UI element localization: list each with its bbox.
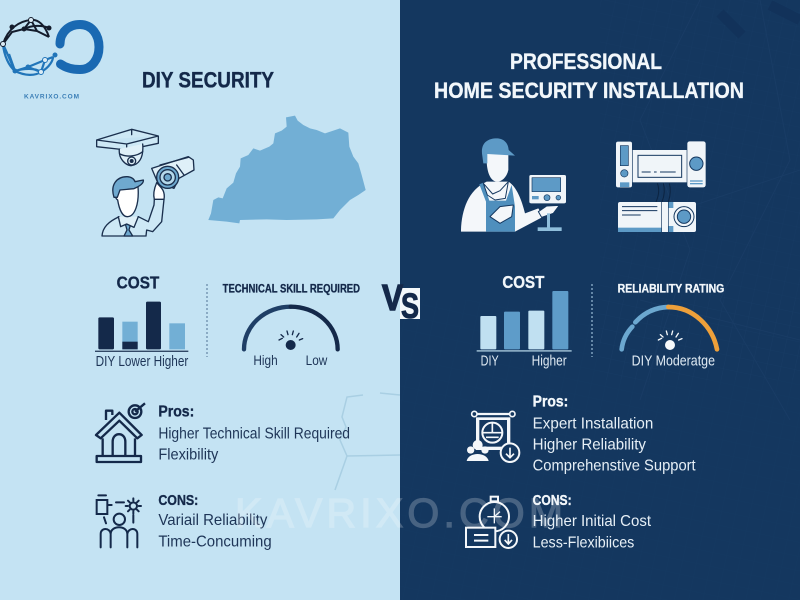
icon: installer with cameras <box>97 129 194 236</box>
chart: DIY cost: DIY Lower Higher <box>96 353 188 370</box>
chart: professional cost <box>477 272 572 370</box>
cons: professional: Less-Flexibiices <box>533 535 634 552</box>
gauge: technical skill <box>223 282 360 368</box>
chart: DIY cost: COST <box>117 273 160 293</box>
chart: professional cost: COST <box>502 272 545 292</box>
chart: DIY cost <box>95 273 188 370</box>
gauge: technical skill: Low <box>306 352 328 368</box>
gauge: reliability rating: DIY Moderatge <box>632 354 715 370</box>
title: DIY security: DIY SECURITY <box>142 68 274 92</box>
panel: DIY security <box>0 0 400 600</box>
chart: professional cost: Higher <box>532 354 567 370</box>
gauge: reliability rating <box>618 282 724 370</box>
pros: DIY: Flexibility <box>158 446 218 463</box>
icon: security equipment <box>616 141 706 232</box>
pros: professional: Pros: <box>533 394 568 411</box>
panel: professional installation <box>400 0 800 600</box>
badge: VS: S <box>401 287 419 326</box>
badge: VS: V <box>382 277 403 318</box>
icon: house with target <box>96 403 145 462</box>
cons: professional: CONS: <box>533 493 572 509</box>
pros: DIY <box>96 403 350 463</box>
icon: people with sun and device <box>97 495 141 547</box>
cons: DIY: Variail Reliability <box>158 512 267 529</box>
icon: control board with people <box>467 411 519 462</box>
divider <box>591 284 593 357</box>
icon: stopwatch with form <box>466 497 517 548</box>
pros: professional <box>467 394 696 475</box>
logo: KAVRIXO.COM <box>24 94 79 100</box>
badge: VS <box>382 277 420 326</box>
cons: DIY: Time-Concuming <box>158 534 272 551</box>
title: professional home security installation: PROFESSIONAL <box>510 49 662 74</box>
pros: DIY: Higher Technical Skill Required <box>158 425 350 442</box>
title: professional home security installation <box>434 49 744 103</box>
icon: technician with control panel <box>461 138 566 232</box>
gauge: reliability rating: RELIABILITY RATING <box>618 282 724 296</box>
gauge: technical skill: TECHNICAL SKILL REQUIRED <box>223 282 360 296</box>
cons: professional: Higher Initial Cost <box>533 513 652 530</box>
divider <box>206 284 208 357</box>
pros: professional: Expert Installation <box>533 415 653 432</box>
cons: DIY <box>97 493 272 551</box>
watermark: KAVRIXO.COM <box>235 490 563 536</box>
title: professional home security installation: HOME SECURITY INSTALLATION <box>434 78 744 103</box>
gauge: technical skill: High <box>253 352 278 368</box>
cons: professional <box>466 493 652 552</box>
chart: professional cost: DIY <box>481 354 499 370</box>
pros: DIY: Pros: <box>158 404 194 421</box>
cons: DIY: CONS: <box>158 493 198 509</box>
pros: professional: Comprehenstive Support <box>533 458 696 475</box>
pros: professional: Higher Reliability <box>533 436 646 453</box>
logo <box>0 18 99 100</box>
map: Kentucky <box>208 116 366 223</box>
